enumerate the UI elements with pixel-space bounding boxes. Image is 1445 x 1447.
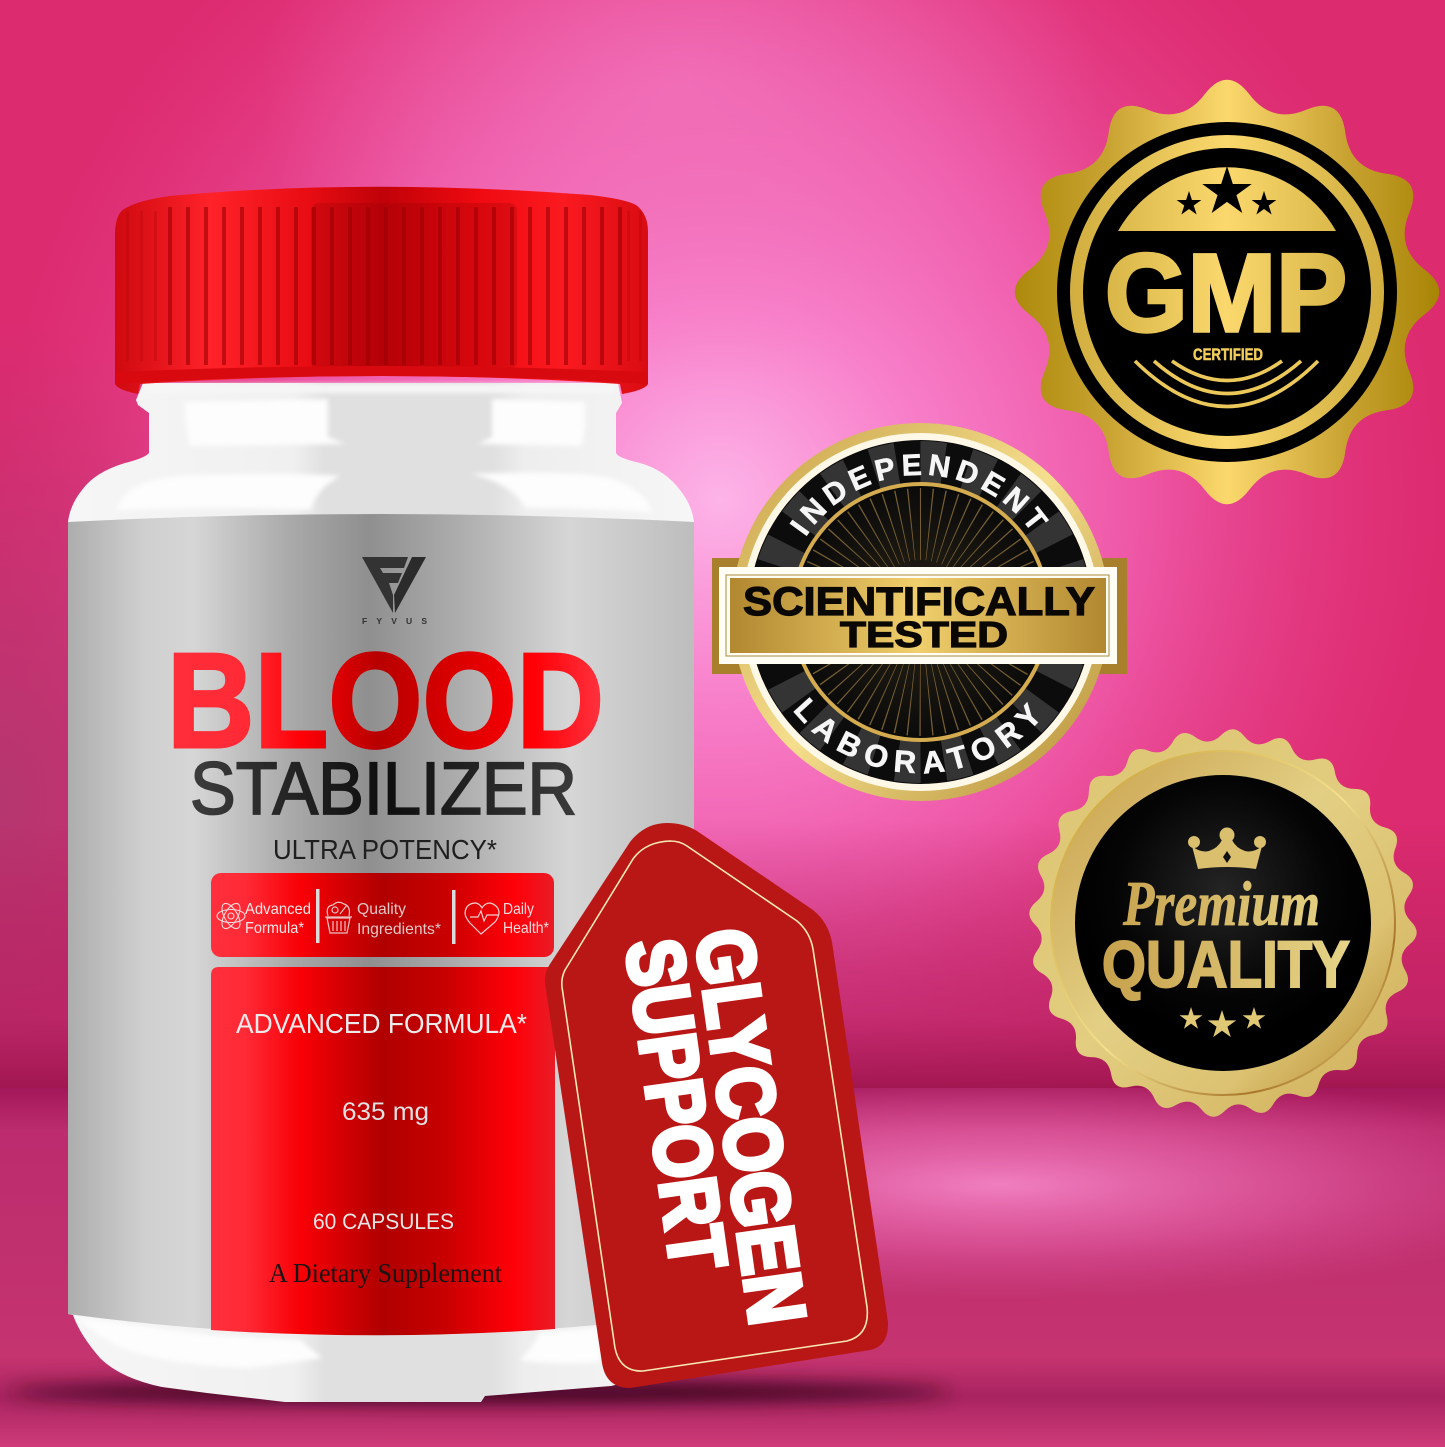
three stars bbox=[1180, 1007, 1265, 1037]
badge: GMP certified bbox=[1015, 80, 1439, 504]
benefit: quality ingredients: Ingredients* bbox=[357, 921, 441, 938]
benefit: quality ingredients: Quality bbox=[357, 901, 406, 918]
premium quality lettering: Premium bbox=[1122, 868, 1320, 939]
brand logo: FYVUS bbox=[362, 616, 427, 626]
icon: atom bbox=[217, 901, 245, 931]
bottle highlights bbox=[78, 384, 652, 1368]
badge: scientifically tested bbox=[712, 423, 1127, 801]
product name: ULTRA POTENCY* bbox=[273, 834, 497, 865]
benefit: advanced formula: Advanced bbox=[245, 901, 311, 918]
gold banner: TESTED bbox=[840, 614, 1008, 655]
icon: basket bbox=[325, 902, 352, 933]
tag: glycogen support: GLYCOGEN bbox=[679, 923, 822, 1330]
bottle body bbox=[68, 383, 694, 1402]
badge: premium quality bbox=[1019, 719, 1427, 1127]
GMP lettering: GMP bbox=[1105, 232, 1347, 355]
benefit: daily health bbox=[503, 901, 549, 937]
gold banner bbox=[719, 567, 1117, 664]
icon: heart bbox=[465, 903, 499, 934]
scalloped edge bbox=[1019, 719, 1427, 1127]
brand logo bbox=[362, 557, 427, 626]
red cap bbox=[115, 187, 648, 394]
badge: premium quality: QUALITY bbox=[1102, 927, 1350, 1001]
curved text: laboratory: LABORATORY bbox=[793, 697, 1038, 774]
gold banner: SCIENTIFICALLY bbox=[743, 580, 1095, 624]
tag: glycogen support: SUPPORT bbox=[609, 934, 743, 1275]
bottle shadow on floor bbox=[10, 1381, 950, 1403]
product name bbox=[167, 625, 604, 865]
gold seal bbox=[1015, 80, 1439, 504]
benefit: quality ingredients bbox=[357, 901, 441, 938]
curved text: independent: INDEPENDENT bbox=[790, 454, 1049, 536]
red formula panel: ADVANCED FORMULA* bbox=[236, 1008, 527, 1039]
product name: STABILIZER bbox=[190, 747, 577, 830]
benefits strip bbox=[211, 873, 554, 957]
star cap bbox=[1118, 167, 1336, 231]
tag: glycogen support bbox=[545, 823, 888, 1388]
curved lines bbox=[1135, 361, 1318, 406]
red formula panel: 635 mg bbox=[342, 1098, 429, 1126]
benefit: advanced formula: Formula* bbox=[245, 920, 304, 937]
badge: GMP certified: CERTIFIED bbox=[1193, 345, 1263, 364]
icon: crown bbox=[1188, 828, 1266, 869]
product bottle bbox=[68, 187, 694, 1402]
benefit: daily health: Health* bbox=[503, 920, 549, 937]
red formula panel: 60 CAPSULES bbox=[313, 1209, 454, 1234]
silver label bbox=[68, 514, 694, 1335]
product name: BLOOD bbox=[167, 625, 604, 776]
red formula panel: A Dietary Supplement bbox=[269, 1258, 502, 1288]
benefit: advanced formula bbox=[245, 901, 311, 937]
benefit: daily health: Daily bbox=[503, 901, 534, 918]
red formula panel bbox=[211, 967, 555, 1335]
